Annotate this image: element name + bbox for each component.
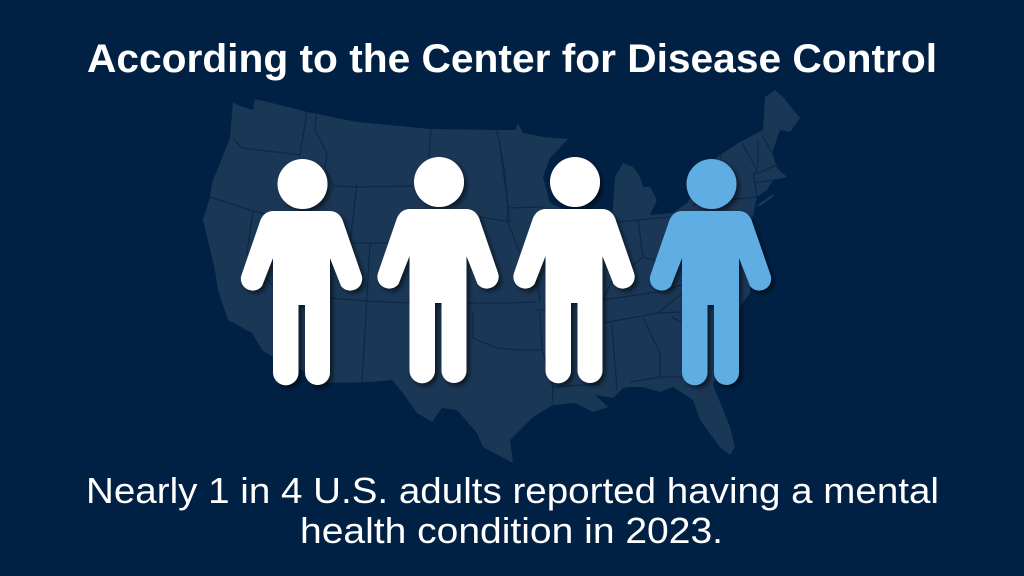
caption: health condition in 2023. [300,510,723,551]
caption: Nearly 1 in 4 U.S. adults reported having a mental [86,470,939,511]
head [414,157,464,207]
person 1 (white) [241,159,362,385]
head [550,157,600,207]
person 4 (blue, highlighted) [650,159,771,385]
map: Long Island [756,194,774,206]
body [650,211,771,385]
head [278,159,328,209]
title: According to the Center for Disease Control [87,37,937,81]
map: United States silhouette with state borders [203,90,800,463]
person 3 (white) [513,157,635,383]
body [241,211,362,385]
person 2 (white) [377,157,499,383]
body [377,209,499,383]
caption [86,470,939,551]
head [686,159,736,209]
body [513,209,635,383]
